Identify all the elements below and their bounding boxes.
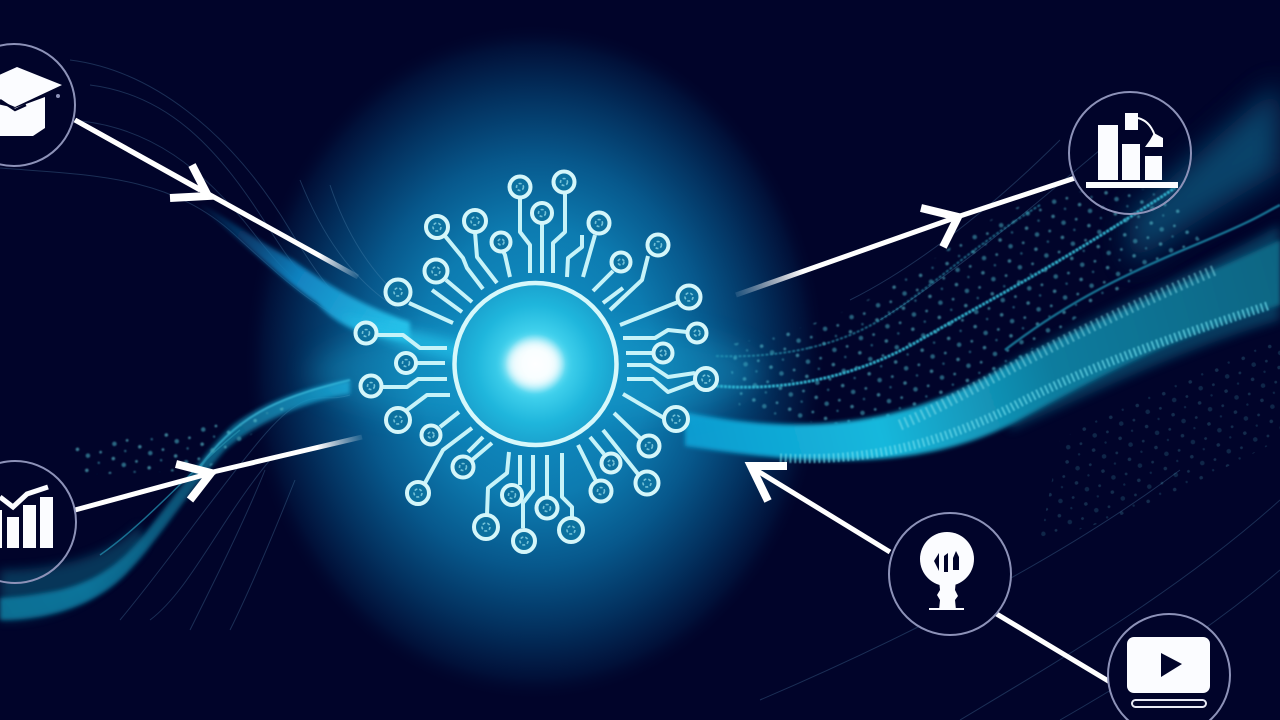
right wave: lower dot field <box>1040 340 1280 540</box>
right wave: thin bright strand two <box>716 188 1175 387</box>
arrow: lightbulb to core <box>751 466 890 552</box>
right wave: soft halo of main band <box>1000 225 1280 430</box>
icon: lightbulb <box>889 513 1011 635</box>
circuit traces <box>378 194 695 528</box>
right wave: thin bright strand one <box>716 205 1040 356</box>
icon: graduation cap <box>0 44 75 166</box>
horizontal core flare <box>310 322 760 422</box>
right wave: main band <box>685 240 1280 460</box>
connector: video to lightbulb <box>995 613 1110 682</box>
core sphere <box>454 283 616 445</box>
icon: analytics bars <box>1069 92 1191 214</box>
icon: video player <box>1108 614 1230 720</box>
circuit end nodes <box>356 172 717 552</box>
right wave: thin strand three <box>1005 205 1280 350</box>
central blue glow <box>243 22 827 702</box>
right wave: dot field <box>725 189 1200 424</box>
left upper band <box>200 205 470 362</box>
icon: rising bar chart <box>0 461 76 583</box>
arrow: graduation cap to core <box>75 120 358 277</box>
circuit core <box>356 172 717 552</box>
arrow: core to bar chart <box>736 178 1075 295</box>
arrow: chart to core <box>75 437 362 510</box>
core highlight <box>506 340 562 388</box>
right wave: haze upper right <box>1130 83 1280 265</box>
left lower dot field <box>70 405 290 475</box>
left lower band <box>0 380 350 620</box>
